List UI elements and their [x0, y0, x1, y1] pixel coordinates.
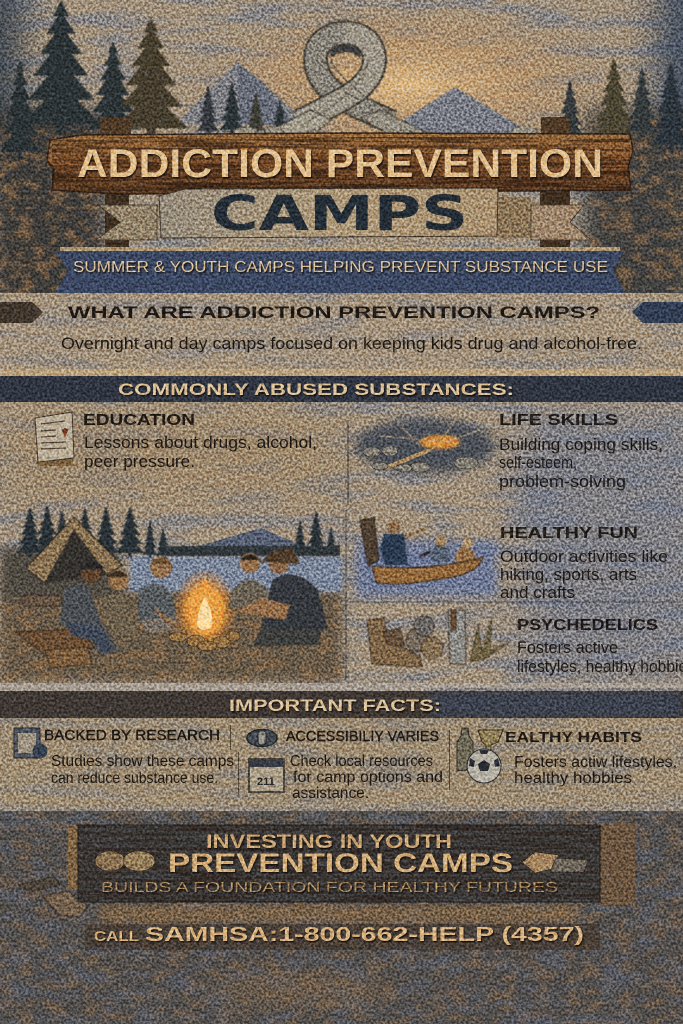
heading: HEALTHY FUN: [500, 525, 638, 542]
description: [500, 547, 668, 602]
description: for camp options and: [293, 769, 443, 786]
description: [290, 753, 443, 802]
panel: important facts heading: [0, 683, 683, 718]
description: [514, 754, 677, 787]
wood plank: [47, 133, 633, 194]
fact: backed by research: [14, 727, 234, 787]
heading: EDUCATION: [83, 412, 195, 429]
title sign: [47, 117, 633, 248]
sign line 3: BUILDS A FOUNDATION FOR HEALTHY FUTURES: [101, 879, 558, 896]
footer rocks: [18, 877, 88, 917]
description: can reduce substance use.: [51, 770, 218, 787]
sign line 2: PREVENTION CAMPS: [168, 848, 513, 878]
fact: healthy habits: [457, 728, 677, 787]
panel: footer: [0, 805, 683, 1024]
description: Building coping skills,: [499, 435, 663, 454]
heading: WHAT ARE ADDICTION PREVENTION CAMPS?: [68, 304, 600, 322]
description: Fosters actiw lifestyles,: [514, 754, 677, 771]
description: self-esteem,: [499, 453, 577, 472]
helpline: [85, 923, 600, 950]
helpline: CALL: [94, 928, 139, 945]
left pine trees: [0, 0, 289, 160]
icon: bottle, trophy and ball: [457, 728, 503, 783]
icon: calendar: [249, 759, 284, 792]
main title: ADDICTION PREVENTION: [77, 142, 603, 186]
header landscape: [0, 0, 683, 310]
description: Outdoor activities like: [500, 547, 668, 566]
subtitle band: [55, 247, 625, 293]
icon: fire pit: [355, 419, 495, 473]
campfire: [169, 568, 240, 652]
subtitle band: SUMMER & YOUTH CAMPS HELPING PREVENT SUBSTANCE USE: [73, 259, 608, 276]
description: Fosters active: [517, 638, 618, 657]
fact: accessibility varies: [247, 728, 443, 802]
panel: life skills: [355, 412, 663, 491]
awareness ribbon: [234, 31, 538, 142]
description: hiking, sports, arts: [500, 565, 637, 584]
logs: [15, 595, 95, 668]
description: assistance.: [292, 785, 369, 802]
panel: healthy fun: [355, 518, 668, 602]
campers: girl and adult: [228, 548, 328, 646]
description: problem-solving: [499, 472, 626, 491]
campfire scene: [0, 505, 342, 682]
banner: [159, 188, 498, 238]
campers: three kids: [60, 556, 178, 655]
heading: LIFE SKILLS: [499, 412, 618, 429]
foliage sides: [0, 110, 683, 310]
description: Studies show these camps: [51, 753, 234, 770]
description: Lessons about drugs, alcohol,: [84, 433, 317, 452]
sign posts: [100, 117, 570, 248]
icon: clipboard chart: [14, 728, 48, 758]
description: healthy hobbies: [514, 770, 632, 787]
panel: important facts heading: IMPORTANT FACTS:: [229, 697, 441, 715]
panel: commonly abused substances heading: [0, 369, 683, 402]
description: Check local resources: [290, 753, 433, 770]
banner tails: [96, 197, 591, 240]
heading: BACKED BY RESEARCH: [44, 727, 220, 744]
icon: paper document: [35, 412, 74, 466]
description: Overnight and day camps focused on keeping kids drug and alcohol-free.: [61, 334, 642, 353]
panel: education: [35, 412, 317, 471]
description: [499, 435, 663, 491]
mountains: [175, 62, 535, 135]
tree line: [16, 505, 340, 562]
helpline: SAMHSA:1-800-662-HELP (4357): [145, 923, 584, 946]
tent: [26, 517, 122, 583]
heading: EALTHY HABITS: [505, 729, 642, 746]
description: and crafts: [500, 583, 575, 602]
icon: coin: [247, 730, 277, 746]
footer sign: [68, 823, 635, 905]
heading: PSYCHEDELICS: [517, 617, 658, 634]
icon: canoe on lake: [355, 518, 497, 598]
panel: facts: [0, 718, 683, 806]
ribbon rocks: [234, 126, 538, 142]
ribbon end: right: [632, 302, 683, 323]
panel: commonly abused substances heading: COMMONLY ABUSED SUBSTANCES:: [118, 381, 514, 399]
right pine trees: [556, 58, 683, 152]
heading: ACCESSIBILIY VARIES: [286, 728, 439, 745]
description: [517, 638, 683, 676]
icon: calendar: 211: [257, 776, 275, 788]
icon: boots and gear: [367, 610, 510, 667]
description: peer pressure.: [84, 452, 195, 471]
camps title: CAMPS: [211, 186, 468, 242]
panel: what are camps: [0, 293, 683, 370]
scene backdrop: [0, 528, 342, 682]
ribbon end: left: [0, 302, 43, 323]
description: [84, 433, 317, 471]
description: [51, 753, 234, 787]
sign line 1: INVESTING IN YOUTH: [206, 832, 452, 853]
stones: [95, 851, 588, 873]
panel: psychedelics: [367, 610, 683, 676]
